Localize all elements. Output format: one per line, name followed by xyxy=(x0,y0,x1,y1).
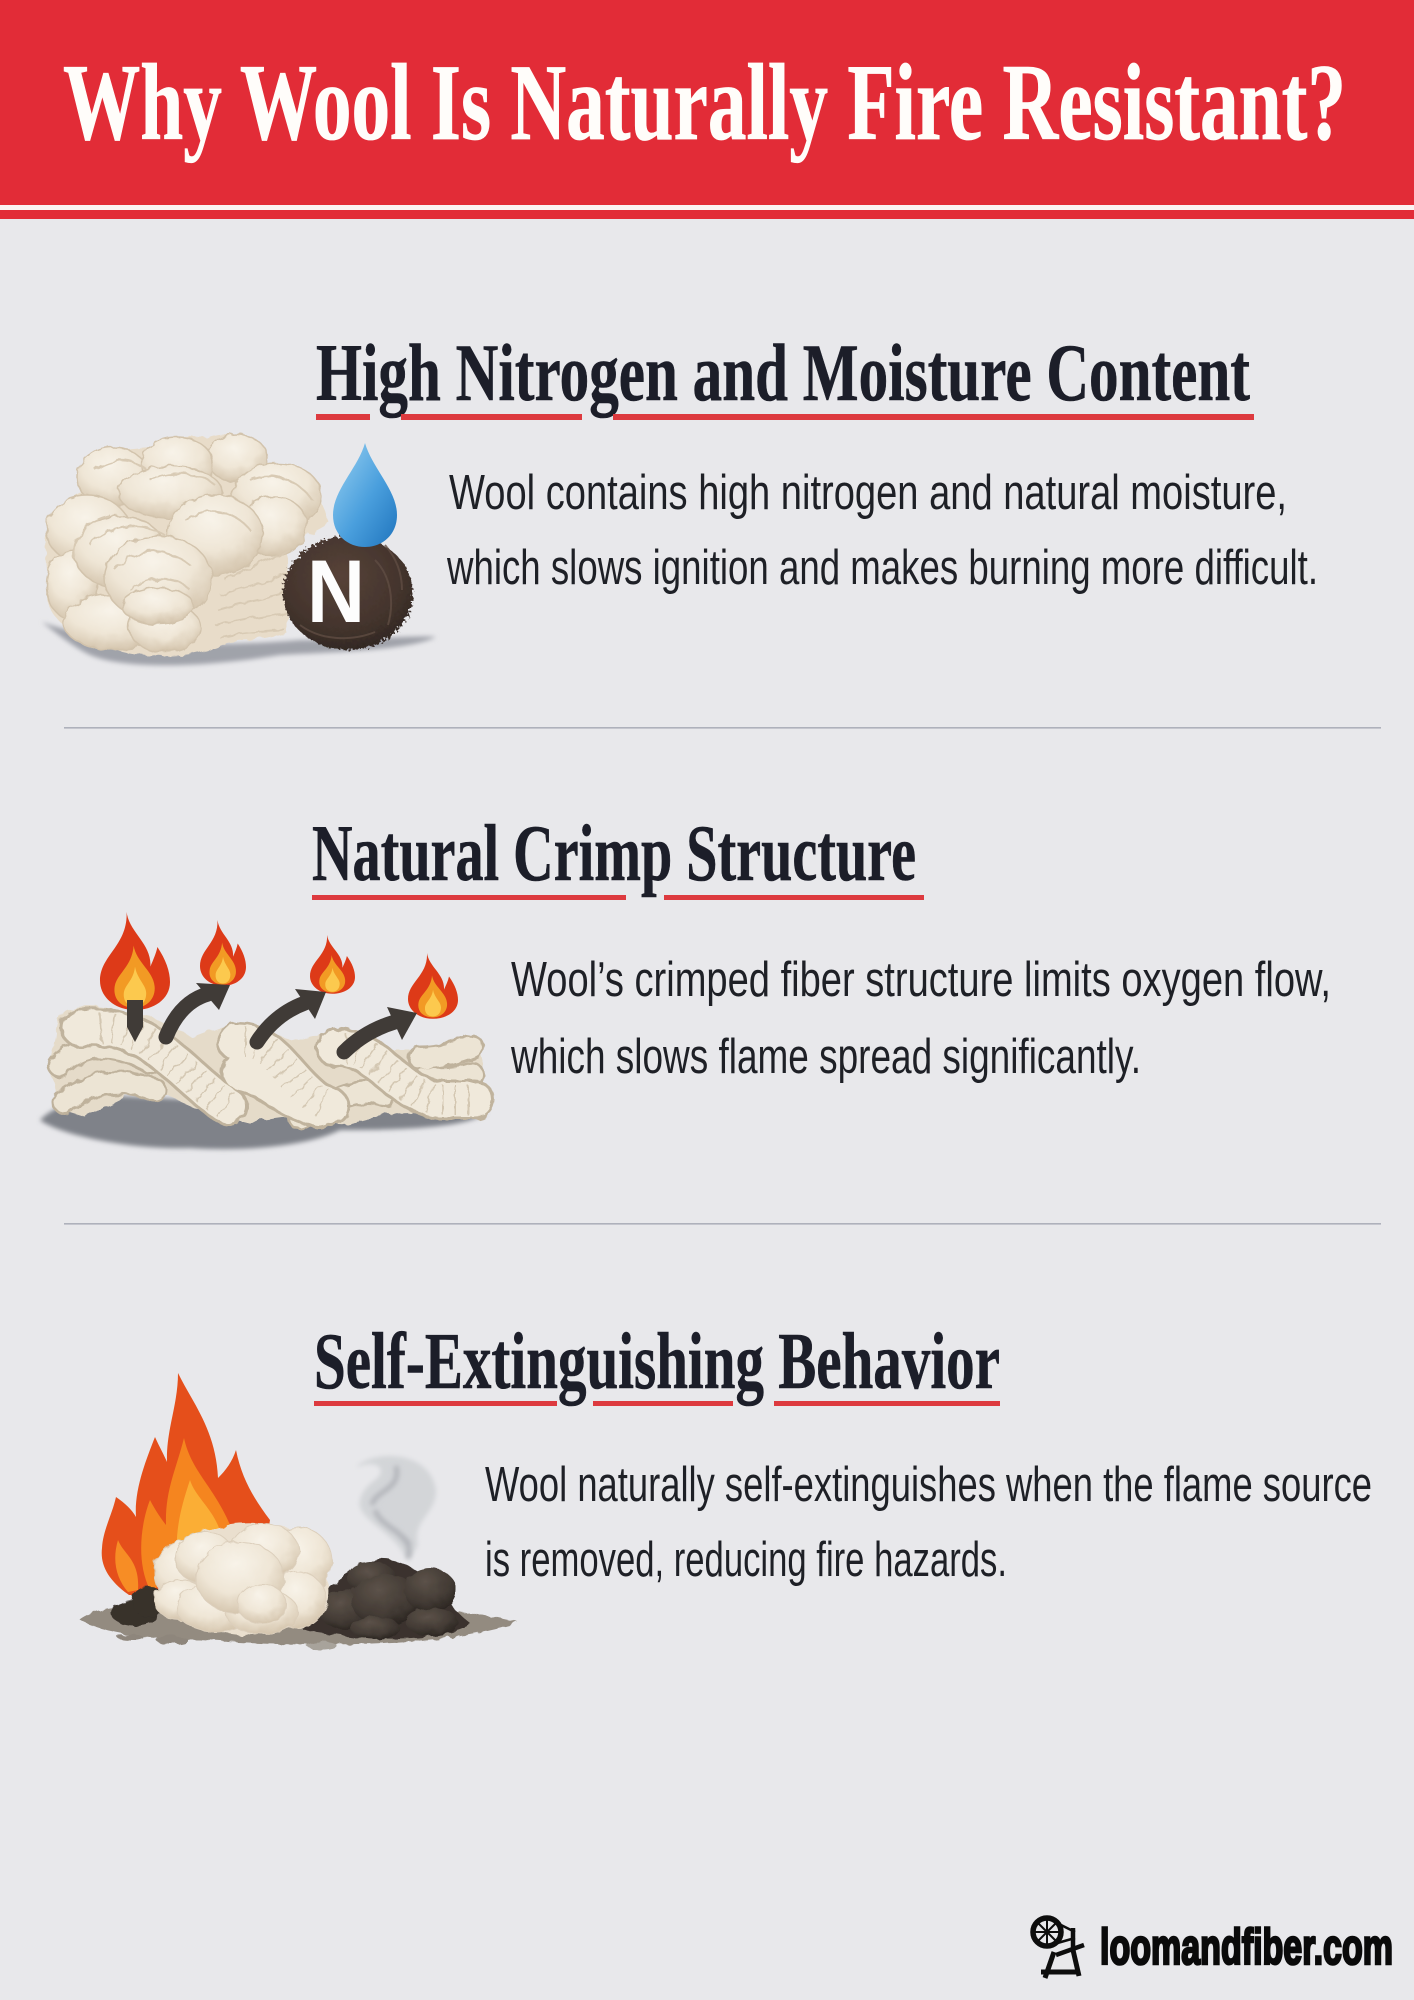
letter N: N xyxy=(307,541,365,641)
water drop xyxy=(333,443,397,547)
ground ash xyxy=(80,1607,518,1650)
icon: wool tuft with nitrogen ball and water drop xyxy=(42,434,436,665)
flame 2 xyxy=(200,920,246,986)
arrows xyxy=(127,983,417,1052)
icon: spinning wheel xyxy=(1033,1918,1084,1978)
body text 1 xyxy=(446,466,1318,595)
wool fibers xyxy=(74,461,312,638)
heading 3 underline xyxy=(314,1401,1000,1406)
smoke xyxy=(357,1456,436,1562)
header banner xyxy=(0,0,1414,219)
body text 2 xyxy=(510,953,1331,1084)
char lump left xyxy=(111,1587,168,1626)
section 1: high nitrogen and moisture content xyxy=(42,327,1318,665)
flame 4 xyxy=(408,953,458,1019)
nitrogen ball xyxy=(283,536,413,650)
heading 1 underline xyxy=(316,414,1254,420)
heading 3: Self-Extinguishing Behavior xyxy=(314,1318,1000,1406)
section 2: natural crimp structure xyxy=(40,810,1331,1149)
heading 2 underline xyxy=(312,895,924,900)
body text 3: is removed, reducing fire hazards. xyxy=(485,1533,1007,1587)
body text 3 xyxy=(485,1458,1372,1587)
section 3: self-extinguishing behavior xyxy=(80,1318,1372,1650)
footer logo xyxy=(1033,1918,1393,1978)
icon: flame, wool and charred residue with smoke xyxy=(80,1373,518,1650)
rope xyxy=(49,1006,489,1125)
heading 2: Natural Crimp Structure xyxy=(312,810,916,898)
icon: crimped wool rope with flames and arrows xyxy=(40,912,489,1149)
body text 2: which slows flame spread significantly. xyxy=(510,1030,1141,1084)
wool puff xyxy=(154,1523,332,1635)
big flame xyxy=(102,1373,270,1595)
flame 1 xyxy=(100,912,170,1010)
charred pile xyxy=(303,1559,472,1640)
flame 3 xyxy=(310,935,355,994)
